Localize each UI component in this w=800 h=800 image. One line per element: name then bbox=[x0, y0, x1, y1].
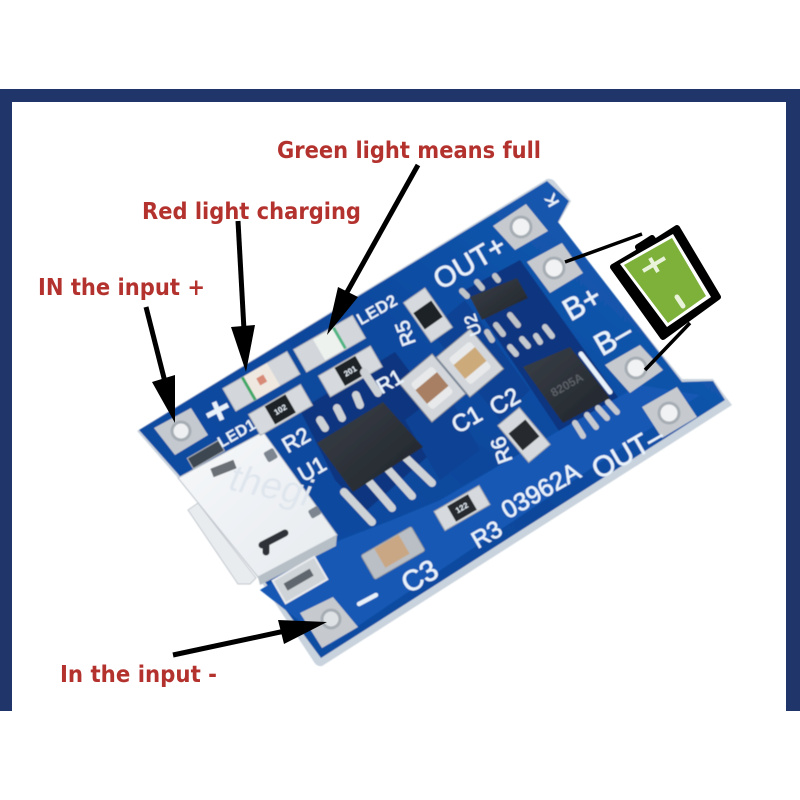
resistor 201 bbox=[318, 346, 382, 397]
SMD footprint near USB top bbox=[187, 440, 224, 469]
chip U1 body bbox=[317, 402, 423, 492]
label: OUT-: OUT– bbox=[587, 419, 670, 486]
label: OUT+: OUT+ bbox=[428, 230, 512, 296]
battery lead: positive bbox=[565, 234, 642, 262]
label: C2: C2 bbox=[485, 383, 525, 421]
battery casing bbox=[613, 228, 718, 337]
label: C3: C3 bbox=[396, 554, 444, 600]
LED2 green indicator bbox=[294, 316, 365, 372]
chip U2 body bbox=[470, 278, 528, 320]
battery green cell bbox=[624, 238, 706, 323]
chip 8205 body: 8205A bbox=[548, 370, 586, 400]
arrow: red light bbox=[231, 221, 255, 372]
solder pad: battery plus bbox=[527, 243, 583, 293]
capacitor C2 bbox=[436, 329, 504, 397]
battery white inset bbox=[620, 234, 711, 327]
battery lead: negative bbox=[645, 323, 690, 370]
micro USB connector: thegi bbox=[226, 457, 317, 516]
solder pad: input minus bbox=[300, 597, 358, 648]
LED1 red indicator bbox=[223, 352, 300, 411]
solder pad: battery minus bbox=[605, 345, 663, 393]
SMD footprint under USB bbox=[273, 557, 327, 603]
panel: charger circuit board bbox=[137, 179, 732, 666]
solder pad: input plus bbox=[154, 408, 208, 455]
navy frame bbox=[0, 89, 800, 711]
caption: Red light charging: Red light charging bbox=[142, 199, 361, 225]
solder pad: output minus bbox=[642, 387, 697, 438]
resistor 102: 102 bbox=[272, 402, 289, 417]
capacitor C1 bbox=[398, 354, 466, 422]
resistor R3 bbox=[434, 485, 490, 531]
label: C1: C1 bbox=[447, 401, 487, 439]
label: U2: U2 bbox=[460, 312, 486, 338]
caption: Green light means full: Green light means full bbox=[277, 138, 541, 164]
silkscreen labels bbox=[207, 189, 670, 604]
label: R2: R2 bbox=[278, 422, 314, 458]
dark copper regions bbox=[300, 260, 620, 512]
caption: IN the input +: IN the input + bbox=[38, 275, 205, 301]
battery plus sign bbox=[643, 258, 665, 272]
arrow: green light bbox=[327, 165, 418, 335]
label: R3: R3 bbox=[467, 516, 507, 554]
chip U1 pins bbox=[320, 372, 432, 522]
label: plus bbox=[207, 402, 228, 420]
chip 8205 body bbox=[523, 347, 610, 423]
label: B-: B– bbox=[588, 313, 639, 363]
chip U2 pins bbox=[462, 276, 518, 340]
label: R6: R6 bbox=[487, 433, 517, 467]
label: LED2: LED2 bbox=[353, 291, 401, 329]
board surface bbox=[139, 181, 725, 658]
label: K mark: K bbox=[540, 189, 563, 210]
capacitor C3 bbox=[361, 526, 425, 580]
label: R5: R5 bbox=[391, 317, 421, 349]
battery minus sign bbox=[677, 297, 683, 306]
board edge bbox=[137, 179, 732, 666]
silkscreen bar beside 8205 bbox=[581, 354, 610, 392]
caption: In the input -: In the input - bbox=[60, 662, 217, 688]
arrow: input plus bbox=[146, 307, 175, 423]
label: minus bbox=[359, 595, 376, 604]
label: R1: R1 bbox=[373, 365, 407, 399]
label: B+: B+ bbox=[556, 278, 608, 328]
battery icon bbox=[565, 228, 718, 370]
label: LED1: LED1 bbox=[215, 416, 259, 452]
label: U1: U1 bbox=[294, 451, 330, 487]
resistor 102 bbox=[249, 384, 312, 435]
resistor beside LED2 bbox=[404, 288, 452, 342]
chip 8205 pins bbox=[510, 327, 617, 436]
label: 03962A: 03962A bbox=[497, 457, 586, 525]
arrow: input minus bbox=[173, 620, 327, 655]
resistor R6 bbox=[498, 408, 550, 462]
solder pad: output plus top bbox=[493, 204, 548, 250]
resistor R3: 122 bbox=[454, 500, 471, 515]
micro USB connector bbox=[178, 432, 337, 585]
resistor 201: 201 bbox=[342, 364, 359, 379]
